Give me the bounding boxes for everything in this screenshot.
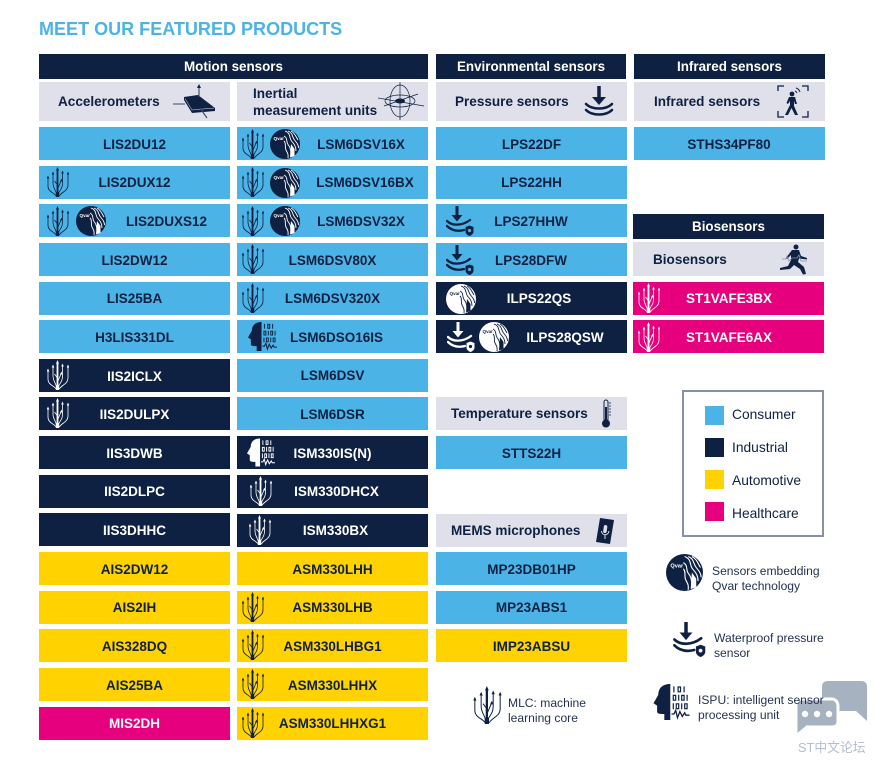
product: MIS2DH: MIS2DH (109, 716, 160, 731)
subheading: temperature sensors (436, 397, 627, 430)
product: MP23DB01HP: MP23DB01HP (487, 562, 576, 577)
heading: motion sensors: Motion sensors (184, 59, 283, 74)
product: LIS2DUXS12: LIS2DUXS12 (126, 214, 207, 229)
product: ILPS22QS (436, 282, 627, 315)
product: ASM330LHHXG1 (237, 707, 428, 740)
product: LPS22HH (436, 166, 627, 199)
product: LSM6DSV80X: LSM6DSV80X (289, 253, 376, 268)
heading: biosensors: Biosensors (692, 219, 765, 234)
icon: MLC key (474, 686, 502, 724)
product: LIS2DUX12: LIS2DUX12 (98, 175, 171, 190)
subheading: inertial measurement units (237, 82, 428, 121)
product: ISM330BX (237, 514, 428, 547)
product: STTS22H: STTS22H (502, 446, 561, 461)
product: IIS3DHHC (39, 513, 230, 546)
note: waterproof pressure sensor (714, 631, 824, 660)
product: LSM6DSV16BX: LSM6DSV16BX (316, 175, 414, 190)
product: IIS3DWB (39, 436, 230, 469)
note: intelligent sensor processing unit: processing unit (698, 708, 779, 722)
product: MP23ABS1: MP23ABS1 (496, 600, 567, 615)
product: LSM6DSV32X: Qvar (274, 213, 284, 218)
note: qvar technology (712, 564, 820, 593)
product: LSM6DSR: LSM6DSR (300, 407, 365, 422)
product: ASM330LHBG1: ASM330LHBG1 (283, 639, 382, 654)
product: LPS22DF: LPS22DF (502, 137, 561, 152)
product: ILPS28QSW (436, 320, 627, 353)
watermark text: ST中文论坛 (798, 740, 866, 755)
product: IIS3DHHC: IIS3DHHC (103, 523, 166, 538)
legend label: consumer: Consumer (732, 407, 796, 422)
product: LSM6DSV16X: Qvar (274, 136, 284, 141)
product: AIS2IH: AIS2IH (113, 600, 156, 615)
product: IMP23ABSU: IMP23ABSU (493, 639, 570, 654)
product: ASM330LHH (237, 552, 428, 585)
product: ST1VAFE3BX (633, 282, 824, 315)
product: LPS22HH: LPS22HH (501, 175, 562, 190)
note: waterproof pressure sensor: Waterproof pressure (714, 631, 824, 645)
product: ST1VAFE3BX: ST1VAFE3BX (686, 291, 772, 306)
product: IIS2DLPC (39, 475, 230, 508)
legend swatch: healthcare (705, 502, 724, 521)
product: LSM6DSV16BX (237, 166, 428, 199)
product: ST1VAFE6AX: ST1VAFE6AX (686, 330, 772, 345)
icon: qvar key: Qvar (670, 564, 684, 570)
icon: qvar key (666, 554, 703, 591)
product: AIS2DW12: AIS2DW12 (101, 562, 168, 577)
product: ISM330IS(N): ISM330IS(N) (293, 446, 372, 461)
subheading: inertial measurement units: Inertial (253, 86, 297, 101)
product: ISM330BX: ISM330BX (303, 523, 368, 538)
product: IIS2ICLX (39, 359, 230, 392)
legend (682, 390, 824, 537)
product: LSM6DSV (237, 359, 428, 392)
product: ASM330LHHX (237, 668, 428, 701)
note: intelligent sensor processing unit (698, 693, 824, 722)
product: LSM6DSO16IS: LSM6DSO16IS (290, 330, 383, 345)
product: LIS2DU12 (39, 127, 230, 160)
icon: ISPU key (654, 684, 690, 720)
icon: gyroscope (378, 82, 424, 120)
subheading: temperature sensors: Temperature sensors (451, 406, 588, 421)
product: MP23DB01HP (436, 552, 627, 585)
note: machine learning core (508, 696, 586, 725)
heading: environmental sensors (436, 54, 626, 79)
product: ASM330LHB: ASM330LHB (292, 600, 373, 615)
subheading: accelerometers (39, 82, 230, 121)
product: LSM6DSV16X: LSM6DSV16X (317, 137, 405, 152)
product: ILPS28QSW: Qvar (482, 329, 493, 334)
product: ST1VAFE6AX (633, 320, 824, 353)
icon: chat bubbles (798, 681, 867, 733)
product: STHS34PF80: STHS34PF80 (687, 137, 771, 152)
product: STTS22H (436, 436, 627, 469)
product: IIS2DULPX: IIS2DULPX (100, 407, 169, 422)
legend label: automotive: Automotive (732, 473, 801, 488)
product: LIS2DUXS12 (39, 204, 230, 237)
subheading: MEMS microphones (436, 514, 627, 547)
heading: infrared sensors (634, 54, 825, 79)
product: ASM330LHH: ASM330LHH (292, 562, 373, 577)
product: AIS25BA: AIS25BA (106, 678, 163, 693)
subheading: inertial measurement units: measurement units (253, 103, 377, 118)
product: LSM6DSV16BX: Qvar (274, 175, 284, 180)
product: STHS34PF80 (634, 127, 825, 160)
product: ISM330DHCX: ISM330DHCX (294, 484, 379, 499)
product: ILPS22QS: Qvar (450, 291, 460, 296)
legend swatch: consumer (705, 406, 724, 425)
product: LIS2DUXS12: Qvar (80, 213, 90, 218)
legend swatch: automotive (705, 470, 724, 489)
product: LIS2DUX12 (39, 166, 230, 199)
note: qvar technology: Qvar technology (712, 579, 800, 593)
icon: waterproof key (673, 622, 706, 657)
subheading: MEMS microphones: MEMS microphones (451, 523, 580, 538)
product: ASM330LHB (237, 591, 428, 624)
icon: thermometer (602, 400, 611, 428)
subheading: pressure sensors (436, 82, 627, 121)
note: qvar technology: Sensors embedding (712, 564, 820, 578)
product: AIS25BA (39, 668, 230, 701)
subheading: biosensors: Biosensors (653, 252, 727, 267)
icon: accelerometer (173, 84, 215, 118)
product: LSM6DSV16X (237, 127, 428, 160)
product: ILPS28QSW: ILPS28QSW (526, 330, 604, 345)
product: LIS2DW12 (39, 243, 230, 276)
subheading: pressure sensors: Pressure sensors (455, 94, 569, 109)
icon: microphone (596, 518, 614, 544)
product: AIS328DQ (39, 629, 230, 662)
product: IIS2DULPX (39, 397, 230, 430)
product: IIS3DWB: IIS3DWB (106, 446, 163, 461)
product: IIS2DLPC: IIS2DLPC (104, 484, 165, 499)
heading: motion sensors (39, 54, 428, 79)
legend swatch: industrial (705, 438, 724, 457)
note: machine learning core: learning core (508, 711, 578, 725)
product: H3LIS331DL (39, 320, 230, 353)
product: LSM6DSV32X (237, 204, 428, 237)
heading: infrared sensors: Infrared sensors (677, 59, 782, 74)
product: LSM6DSO16IS (237, 320, 428, 353)
subheading: accelerometers: Accelerometers (58, 94, 160, 109)
product: ASM330LHHX: ASM330LHHX (288, 678, 377, 693)
subheading: infrared sensors (634, 82, 825, 121)
heading: biosensors (633, 214, 824, 239)
product: IIS2ICLX: IIS2ICLX (107, 369, 162, 384)
product: ASM330LHHXG1: ASM330LHHXG1 (279, 716, 386, 731)
product: LPS22DF (436, 127, 627, 160)
product: LSM6DSR (237, 397, 428, 430)
legend label: healthcare: Healthcare (732, 506, 799, 521)
product: MP23ABS1 (436, 591, 627, 624)
product: LPS27HHW (436, 204, 627, 237)
note: machine learning core: MLC: machine (508, 696, 586, 710)
subheading: infrared sensors: Infrared sensors (654, 94, 760, 109)
product: LIS25BA: LIS25BA (107, 291, 162, 306)
heading: environmental sensors: Environmental sensors (457, 59, 605, 74)
product: LSM6DSV: LSM6DSV (301, 368, 364, 383)
product: LIS2DU12: LIS2DU12 (103, 137, 166, 152)
watermark (798, 681, 867, 755)
product: LSM6DSV320X (237, 282, 428, 315)
product: ASM330LHBG1 (237, 629, 428, 662)
product: AIS2IH (39, 591, 230, 624)
product: ISM330IS(N) (237, 436, 428, 469)
product: H3LIS331DL: H3LIS331DL (95, 330, 174, 345)
product: ISM330DHCX (237, 475, 428, 508)
product: LSM6DSV320X: LSM6DSV320X (285, 291, 380, 306)
product: MIS2DH (39, 707, 230, 740)
product: LSM6DSV80X (237, 243, 428, 276)
product: LPS28DFW (436, 243, 627, 276)
product: AIS328DQ: AIS328DQ (102, 639, 167, 654)
product: LIS25BA (39, 282, 230, 315)
legend label: industrial: Industrial (732, 440, 788, 455)
subheading: biosensors (633, 242, 824, 276)
product: AIS2DW12 (39, 552, 230, 585)
icon: runner (780, 244, 807, 274)
note: intelligent sensor processing unit: ISPU: intelligent sensor (698, 693, 824, 707)
product: LSM6DSV32X: LSM6DSV32X (317, 214, 405, 229)
product: LIS2DW12: LIS2DW12 (101, 253, 168, 268)
product: LPS28DFW: LPS28DFW (495, 253, 567, 268)
product: ILPS22QS: ILPS22QS (507, 291, 571, 306)
icon: pressure (584, 86, 614, 116)
note: waterproof pressure sensor: sensor (714, 646, 750, 660)
product: IMP23ABSU (436, 629, 627, 662)
icon: infrared person (777, 85, 809, 118)
product: LPS27HHW: LPS27HHW (494, 214, 568, 229)
title: MEET OUR FEATURED PRODUCTS (39, 19, 342, 39)
